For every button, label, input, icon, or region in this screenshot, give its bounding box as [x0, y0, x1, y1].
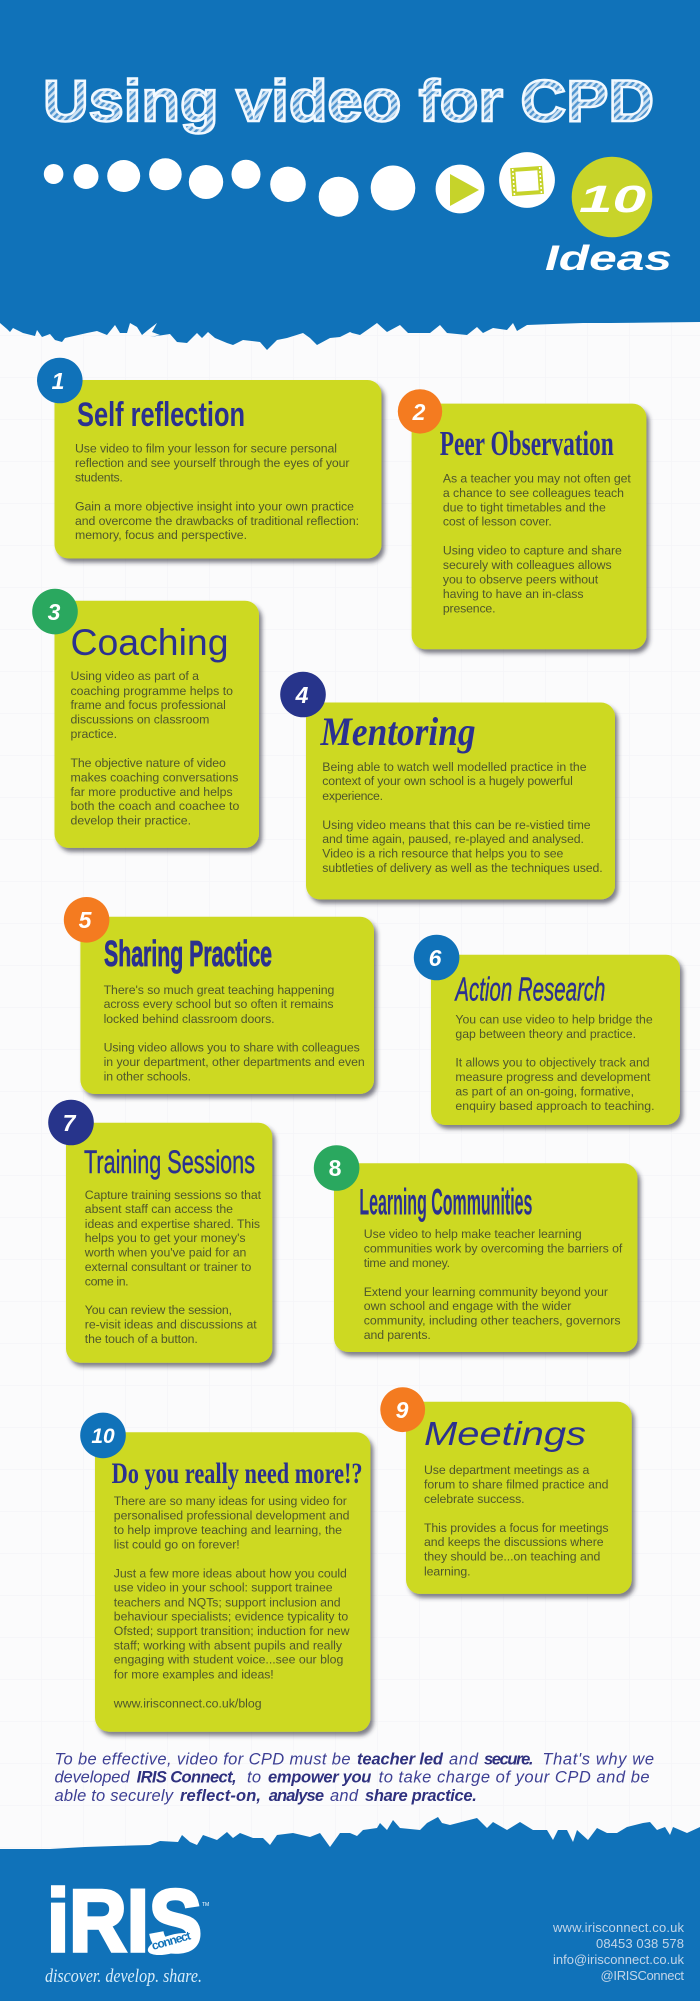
- body text: This provides a focus for meetings: [424, 1521, 608, 1535]
- body text: coaching programme helps to: [70, 684, 233, 698]
- body text: [113, 1494, 350, 1710]
- body text: cost of lesson cover.: [443, 515, 552, 529]
- body text: celebrate success.: [424, 1492, 525, 1506]
- body text: discussions on classroom: [70, 712, 209, 726]
- closing statement: analyse: [269, 1787, 324, 1805]
- badge 2: 2: [412, 399, 426, 425]
- body text: come in.: [85, 1274, 129, 1288]
- body text: Using video allows you to share with colleagues: [104, 1040, 360, 1054]
- body text: the touch of a button.: [85, 1332, 198, 1346]
- heading: self reflection: Self reflection: [77, 396, 245, 434]
- body text: Extend your learning community beyond your: [364, 1285, 608, 1299]
- panel: 1 self reflection: [37, 358, 382, 558]
- body text: Use video to film your lesson for secure personal: [75, 442, 337, 456]
- body text: Using video as part of a: [70, 669, 199, 683]
- badge 7: [48, 1100, 94, 1145]
- body text: securely with colleagues allows: [443, 558, 612, 572]
- badge 4: [280, 672, 326, 717]
- body text: due to tight timetables and the: [443, 500, 606, 514]
- body text: re-visit ideas and discussions at: [85, 1318, 257, 1332]
- body text: Being able to watch well modelled practice in the: [322, 760, 587, 774]
- body text: [364, 1227, 623, 1342]
- closing statement: reflect-on,: [180, 1787, 261, 1805]
- closing statement: IRIS Connect,: [137, 1768, 237, 1786]
- body text: community, including other teachers, governors: [364, 1314, 620, 1328]
- icon: play button: [436, 165, 484, 213]
- panel: 6 action research: [414, 935, 680, 1125]
- body text: both the coach and coachee to: [70, 799, 239, 813]
- body text: use video in your school: support trainee: [114, 1581, 333, 1595]
- contact details: 08453 038 578: [596, 1936, 684, 1951]
- badge 10: [80, 1413, 126, 1458]
- body text: Using video means that this can be re-vistied time: [322, 818, 591, 832]
- body text: and time again, paused, re-played and analysed.: [322, 832, 584, 846]
- body text: Video is a rich resource that helps you to see: [322, 846, 564, 860]
- body text: You can review the session,: [85, 1303, 232, 1317]
- badge 3: 3: [48, 599, 61, 625]
- body text: list could go on forever!: [114, 1538, 240, 1552]
- badge 4: 4: [295, 682, 309, 708]
- logo: iris connect: iRIS: [47, 1871, 202, 1970]
- body text: and overcome the drawbacks of traditional reflection:: [75, 514, 359, 528]
- heading: sharing practice: Sharing Practice: [104, 933, 272, 974]
- body text: enquiry based approach to teaching.: [455, 1099, 654, 1113]
- body text: presence.: [443, 601, 496, 615]
- body text: [443, 471, 631, 615]
- body text: forum to share filmed practice and: [424, 1477, 609, 1491]
- heading: do you really need more: Do you really need more!?: [112, 1457, 363, 1490]
- body text: [322, 760, 603, 875]
- badge 8: 8: [329, 1155, 342, 1181]
- heading: mentoring: Mentoring: [320, 709, 476, 754]
- panel: 3 coaching: [32, 589, 259, 848]
- heading: coaching: Coaching: [70, 622, 228, 663]
- contact details: info@irisconnect.co.uk: [553, 1952, 684, 1967]
- body text: personalised professional development and: [114, 1508, 350, 1522]
- badge 5: [64, 897, 109, 943]
- body text: you to observe peers without: [443, 572, 599, 586]
- body text: gap between theory and practice.: [455, 1027, 636, 1041]
- closing statement: to: [247, 1768, 261, 1786]
- badge 5: 5: [79, 907, 93, 933]
- panel: 10 do you really need more: [80, 1413, 370, 1732]
- body text: There's so much great teaching happening: [104, 983, 335, 997]
- ten ideas badge: [545, 157, 672, 278]
- body text: subtleties of delivery as well as the techniques used.: [322, 861, 603, 875]
- badge 2: [398, 389, 442, 434]
- body text: across every school but so often it remains: [104, 997, 333, 1011]
- body text: [104, 983, 365, 1084]
- badge 9: [380, 1387, 425, 1432]
- body text: staff; working with absent pupils and really: [114, 1638, 343, 1652]
- ten ideas badge: 10: [579, 179, 646, 221]
- heading: meetings: Meetings: [424, 1415, 586, 1452]
- body text: Use video to help make teacher learning: [364, 1227, 582, 1241]
- body text: [84, 1188, 262, 1346]
- body text: in other schools.: [104, 1070, 191, 1084]
- badge 7: 7: [63, 1110, 77, 1136]
- badge 6: 6: [429, 945, 442, 971]
- closing statement: share practice.: [365, 1787, 477, 1805]
- heading: peer observation: Peer Observation: [440, 424, 614, 463]
- closing statement: To be effective, video for CPD must be: [54, 1750, 350, 1768]
- body text: engaging with student voice...see our blog: [114, 1653, 343, 1667]
- body text: Ofsted; support transition; induction for new: [114, 1624, 350, 1638]
- body text: develop their practice.: [70, 814, 191, 828]
- body text: communities work by overcoming the barriers of: [364, 1242, 623, 1256]
- body text: You can use video to help bridge the: [455, 1012, 653, 1026]
- body text: as part of an on-going, formative,: [455, 1084, 634, 1098]
- body text: students.: [75, 470, 123, 484]
- body text: external consultant or trainer to: [85, 1260, 251, 1274]
- body text: Use department meetings as a: [424, 1463, 589, 1477]
- badge 6: [414, 935, 459, 980]
- body text: measure progress and development: [455, 1070, 651, 1084]
- badge 1: [37, 358, 83, 403]
- closing statement: [54, 1750, 654, 1805]
- body text: for more examples and ideas!: [114, 1667, 274, 1681]
- body text: having to have an in-class: [443, 587, 584, 601]
- body text: As a teacher you may not often get: [443, 471, 631, 485]
- badge 9: 9: [396, 1397, 409, 1423]
- header band with torn edge: [0, 0, 700, 350]
- footer band with torn edge: [0, 1817, 700, 2001]
- body text: helps you to get your money's: [85, 1231, 246, 1245]
- body text: they should be...on teaching and: [424, 1549, 601, 1563]
- closing statement: to take charge of your CPD and be: [379, 1768, 650, 1786]
- body text: reflection and see yourself through the eyes of your: [75, 456, 350, 470]
- body text: worth when you've paid for an: [84, 1246, 247, 1260]
- body text: There are so many ideas for using video for: [114, 1494, 347, 1508]
- closing statement: That's why we: [542, 1750, 654, 1768]
- contact details: www.irisconnect.co.uk: [552, 1920, 684, 1935]
- body text: It allows you to objectively track and: [455, 1056, 650, 1070]
- icon: film frame: [499, 152, 555, 208]
- body text: memory, focus and perspective.: [75, 528, 247, 542]
- body text: [70, 669, 239, 828]
- body text: Using video to capture and share: [443, 544, 622, 558]
- contact details: [552, 1920, 684, 1983]
- body text: Capture training sessions so that: [85, 1188, 262, 1202]
- heading: action research: Action Research: [454, 970, 605, 1008]
- heading: training sessions: Training Sessions: [84, 1144, 255, 1180]
- closing statement: developed: [54, 1768, 130, 1786]
- logo: iris connect: connect: [150, 1928, 192, 1953]
- body text: Gain a more objective insight into your own practice: [75, 499, 354, 513]
- panel: 5 sharing practice: [64, 897, 374, 1094]
- badge 8: [314, 1145, 359, 1191]
- body text: a chance to see colleagues teach: [443, 486, 624, 500]
- body text: practice.: [70, 727, 117, 741]
- body text: [455, 1012, 654, 1113]
- body text: makes coaching conversations: [70, 770, 238, 784]
- panel: 2 peer observation: [398, 389, 646, 649]
- closing statement: teacher led: [357, 1750, 444, 1768]
- closing statement: able to securely: [54, 1787, 175, 1805]
- body text: far more productive and helps: [70, 785, 233, 799]
- body text: context of your own school is a hugely powerful: [322, 774, 573, 788]
- body text: in your department, other departments and even: [104, 1055, 365, 1069]
- body text: own school and engage with the wider: [364, 1299, 571, 1313]
- body text: [424, 1463, 609, 1578]
- body text: and parents.: [364, 1328, 431, 1342]
- body text: frame and focus professional: [70, 698, 226, 712]
- body text: learning.: [424, 1564, 470, 1578]
- closing statement: secure.: [484, 1750, 534, 1768]
- body text: to help improve teaching and learning, the: [114, 1523, 342, 1537]
- logo: iris connect: TM: [202, 1902, 209, 1908]
- closing statement: and: [330, 1787, 359, 1805]
- badge 3: [32, 589, 78, 634]
- ten ideas badge: Ideas: [545, 239, 672, 278]
- body text: [75, 442, 359, 542]
- dotted trail of circles: [44, 158, 415, 217]
- body text: and keeps the discussions where: [424, 1535, 604, 1549]
- body text: ideas and expertise shared. This: [85, 1217, 260, 1231]
- closing statement: and: [449, 1750, 479, 1768]
- panel: 7 training sessions: [48, 1100, 272, 1363]
- body text: www.irisconnect.co.uk/blog: [113, 1696, 262, 1710]
- title: Using video for CPD: [43, 69, 654, 134]
- panel: 8 learning communities: [314, 1145, 638, 1352]
- badge 1: 1: [52, 368, 64, 394]
- body text: Just a few more ideas about how you could: [114, 1566, 347, 1580]
- logo: iris connect: discover. develop. share.: [45, 1966, 202, 1987]
- panel: 9 meetings: [380, 1387, 632, 1594]
- body text: behaviour specialists; evidence typicality to: [114, 1610, 348, 1624]
- badge 10: 10: [91, 1425, 115, 1448]
- closing statement: empower you: [268, 1768, 371, 1786]
- body text: absent staff can access the: [85, 1202, 233, 1216]
- contact details: @IRISConnect: [600, 1968, 684, 1983]
- body text: experience.: [322, 789, 383, 803]
- body text: The objective nature of video: [70, 756, 226, 770]
- body text: time and money.: [364, 1256, 450, 1270]
- body text: teachers and NQTs; support inclusion and: [114, 1595, 341, 1609]
- body text: locked behind classroom doors.: [104, 1012, 275, 1026]
- panel: 4 mentoring: [280, 672, 615, 900]
